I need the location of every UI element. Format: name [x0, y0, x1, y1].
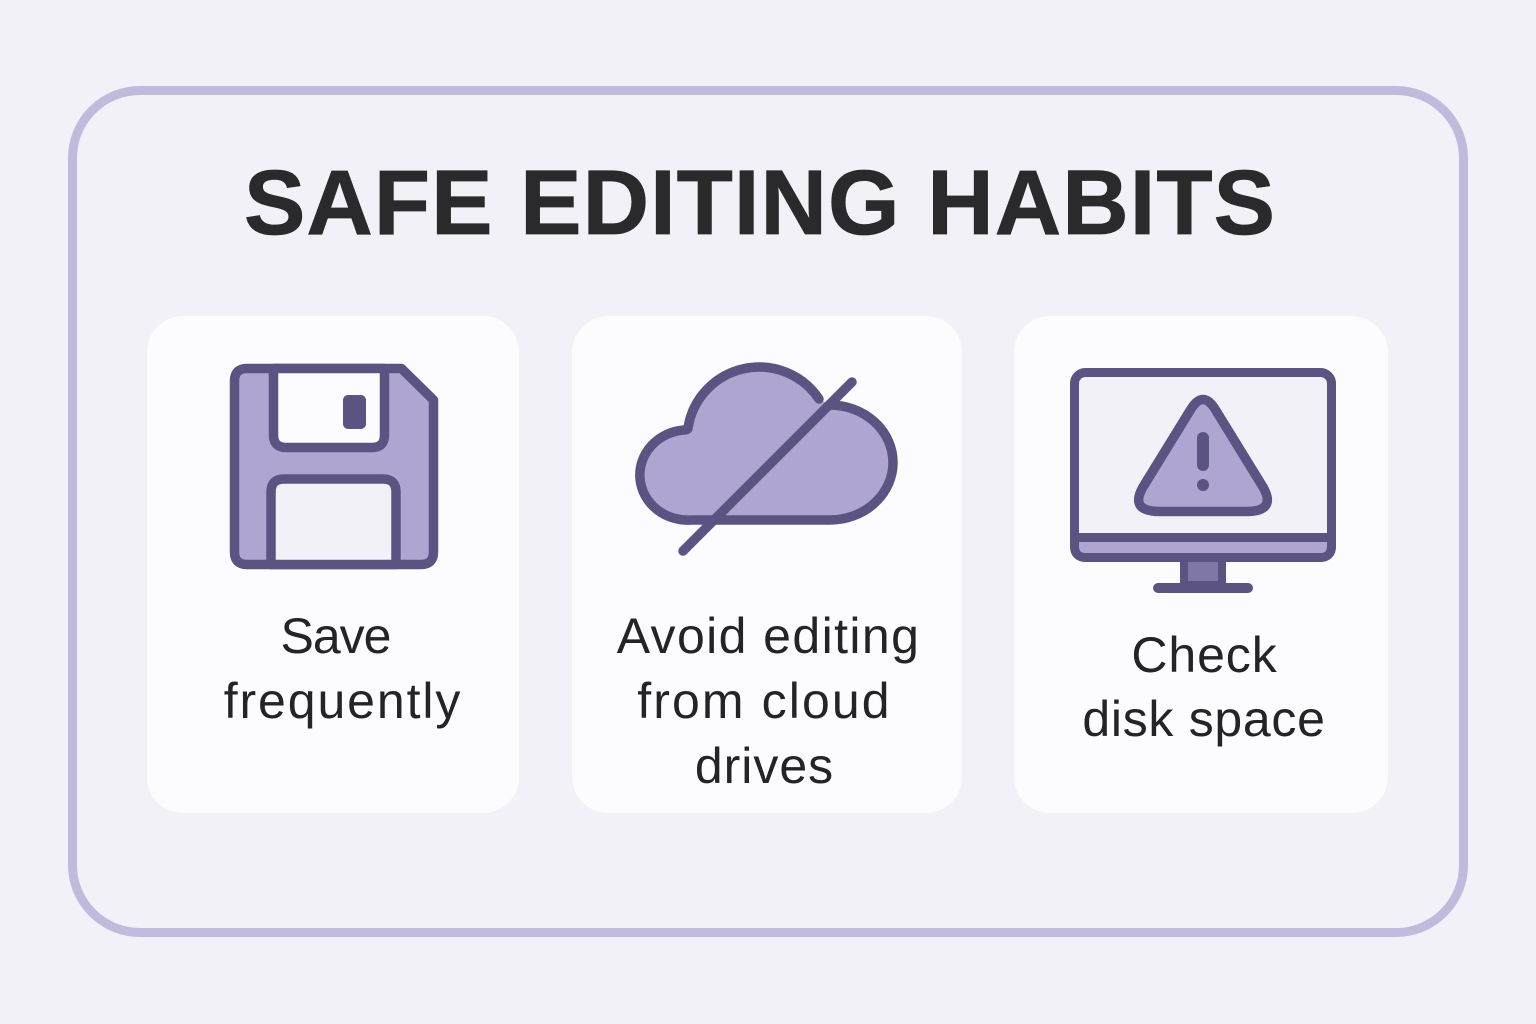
label: save frequently: Save [281, 608, 390, 664]
label: avoid editing from cloud drives: from cloud [637, 673, 892, 729]
label: check disk space: disk space [1082, 691, 1326, 747]
label: avoid editing from cloud drives: drives [695, 738, 834, 794]
title: SAFE EDITING HABITS [244, 152, 1276, 254]
label: check disk space: Check [1131, 627, 1278, 683]
label: save frequently [224, 608, 462, 729]
outer frame [68, 86, 1468, 937]
icon: floppy disk [230, 364, 438, 570]
icon: cloud crossed out [635, 362, 898, 556]
panel: avoid editing from cloud drives [572, 316, 962, 813]
icon: monitor with warning [1070, 368, 1336, 593]
label: check disk space [1082, 627, 1326, 747]
panel: save frequently [147, 316, 519, 813]
panel: check disk space [1014, 316, 1388, 813]
label: avoid editing from cloud drives [616, 608, 920, 794]
label: avoid editing from cloud drives: Avoid editing [617, 608, 920, 664]
label: save frequently: frequently [224, 673, 462, 729]
